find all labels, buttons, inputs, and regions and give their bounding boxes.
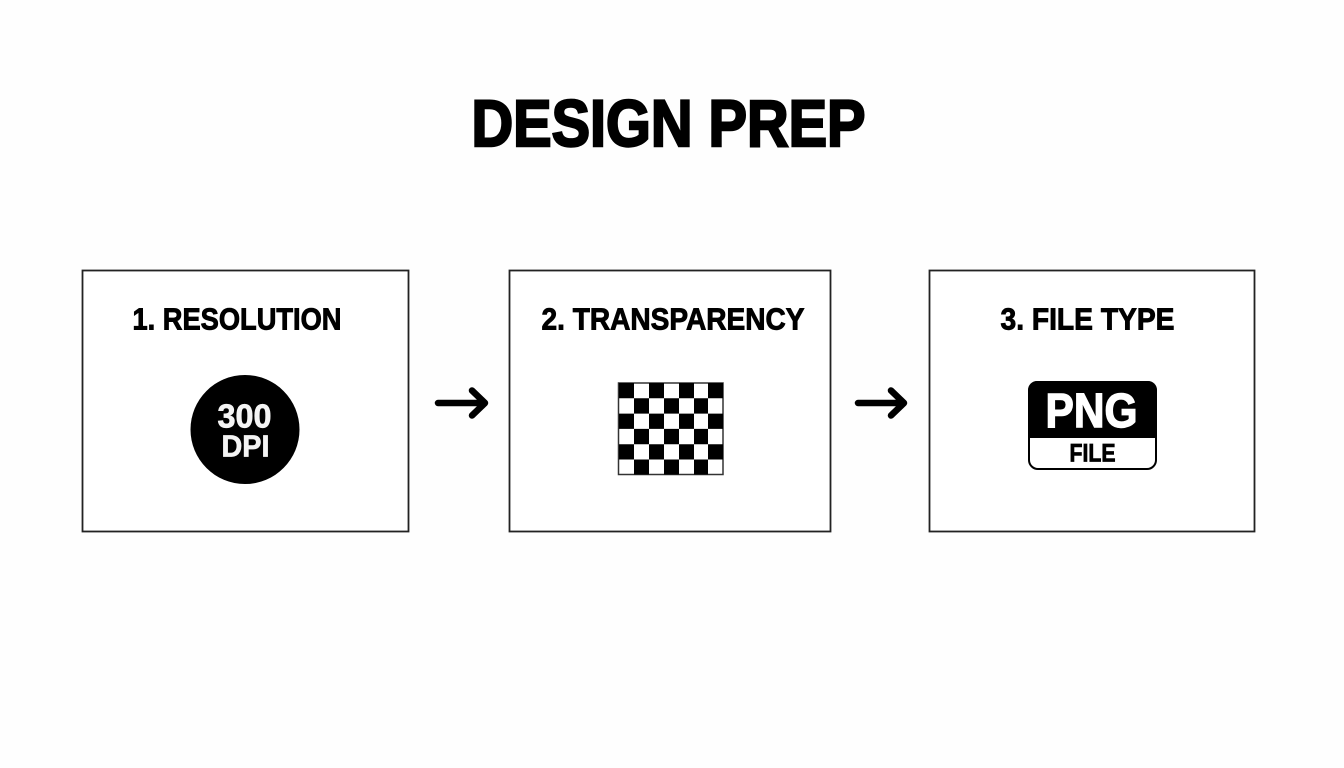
heading: file type: 3. FILE TYPE [1000, 302, 1174, 336]
panel: resolution [82, 270, 408, 532]
icon: PNG file badge: FILE [1070, 440, 1116, 468]
arrow: transparency to file type [858, 390, 904, 416]
title: DESIGN PREP [472, 86, 866, 160]
icon: 300 DPI badge: DPI [222, 428, 270, 464]
heading: resolution: 1. RESOLUTION [132, 302, 342, 336]
arrow: resolution to transparency [438, 390, 485, 416]
icon: 300 DPI badge: 300 [218, 398, 272, 434]
heading: transparency: 2. TRANSPARENCY [542, 302, 805, 336]
icon: PNG file badge: PNG [1046, 385, 1138, 438]
panel: transparency [510, 270, 830, 532]
icon: 300 DPI badge [190, 375, 300, 484]
panel: file type [930, 270, 1254, 532]
icon: PNG file badge [1028, 381, 1157, 469]
icon: transparency checkerboard [618, 383, 723, 474]
